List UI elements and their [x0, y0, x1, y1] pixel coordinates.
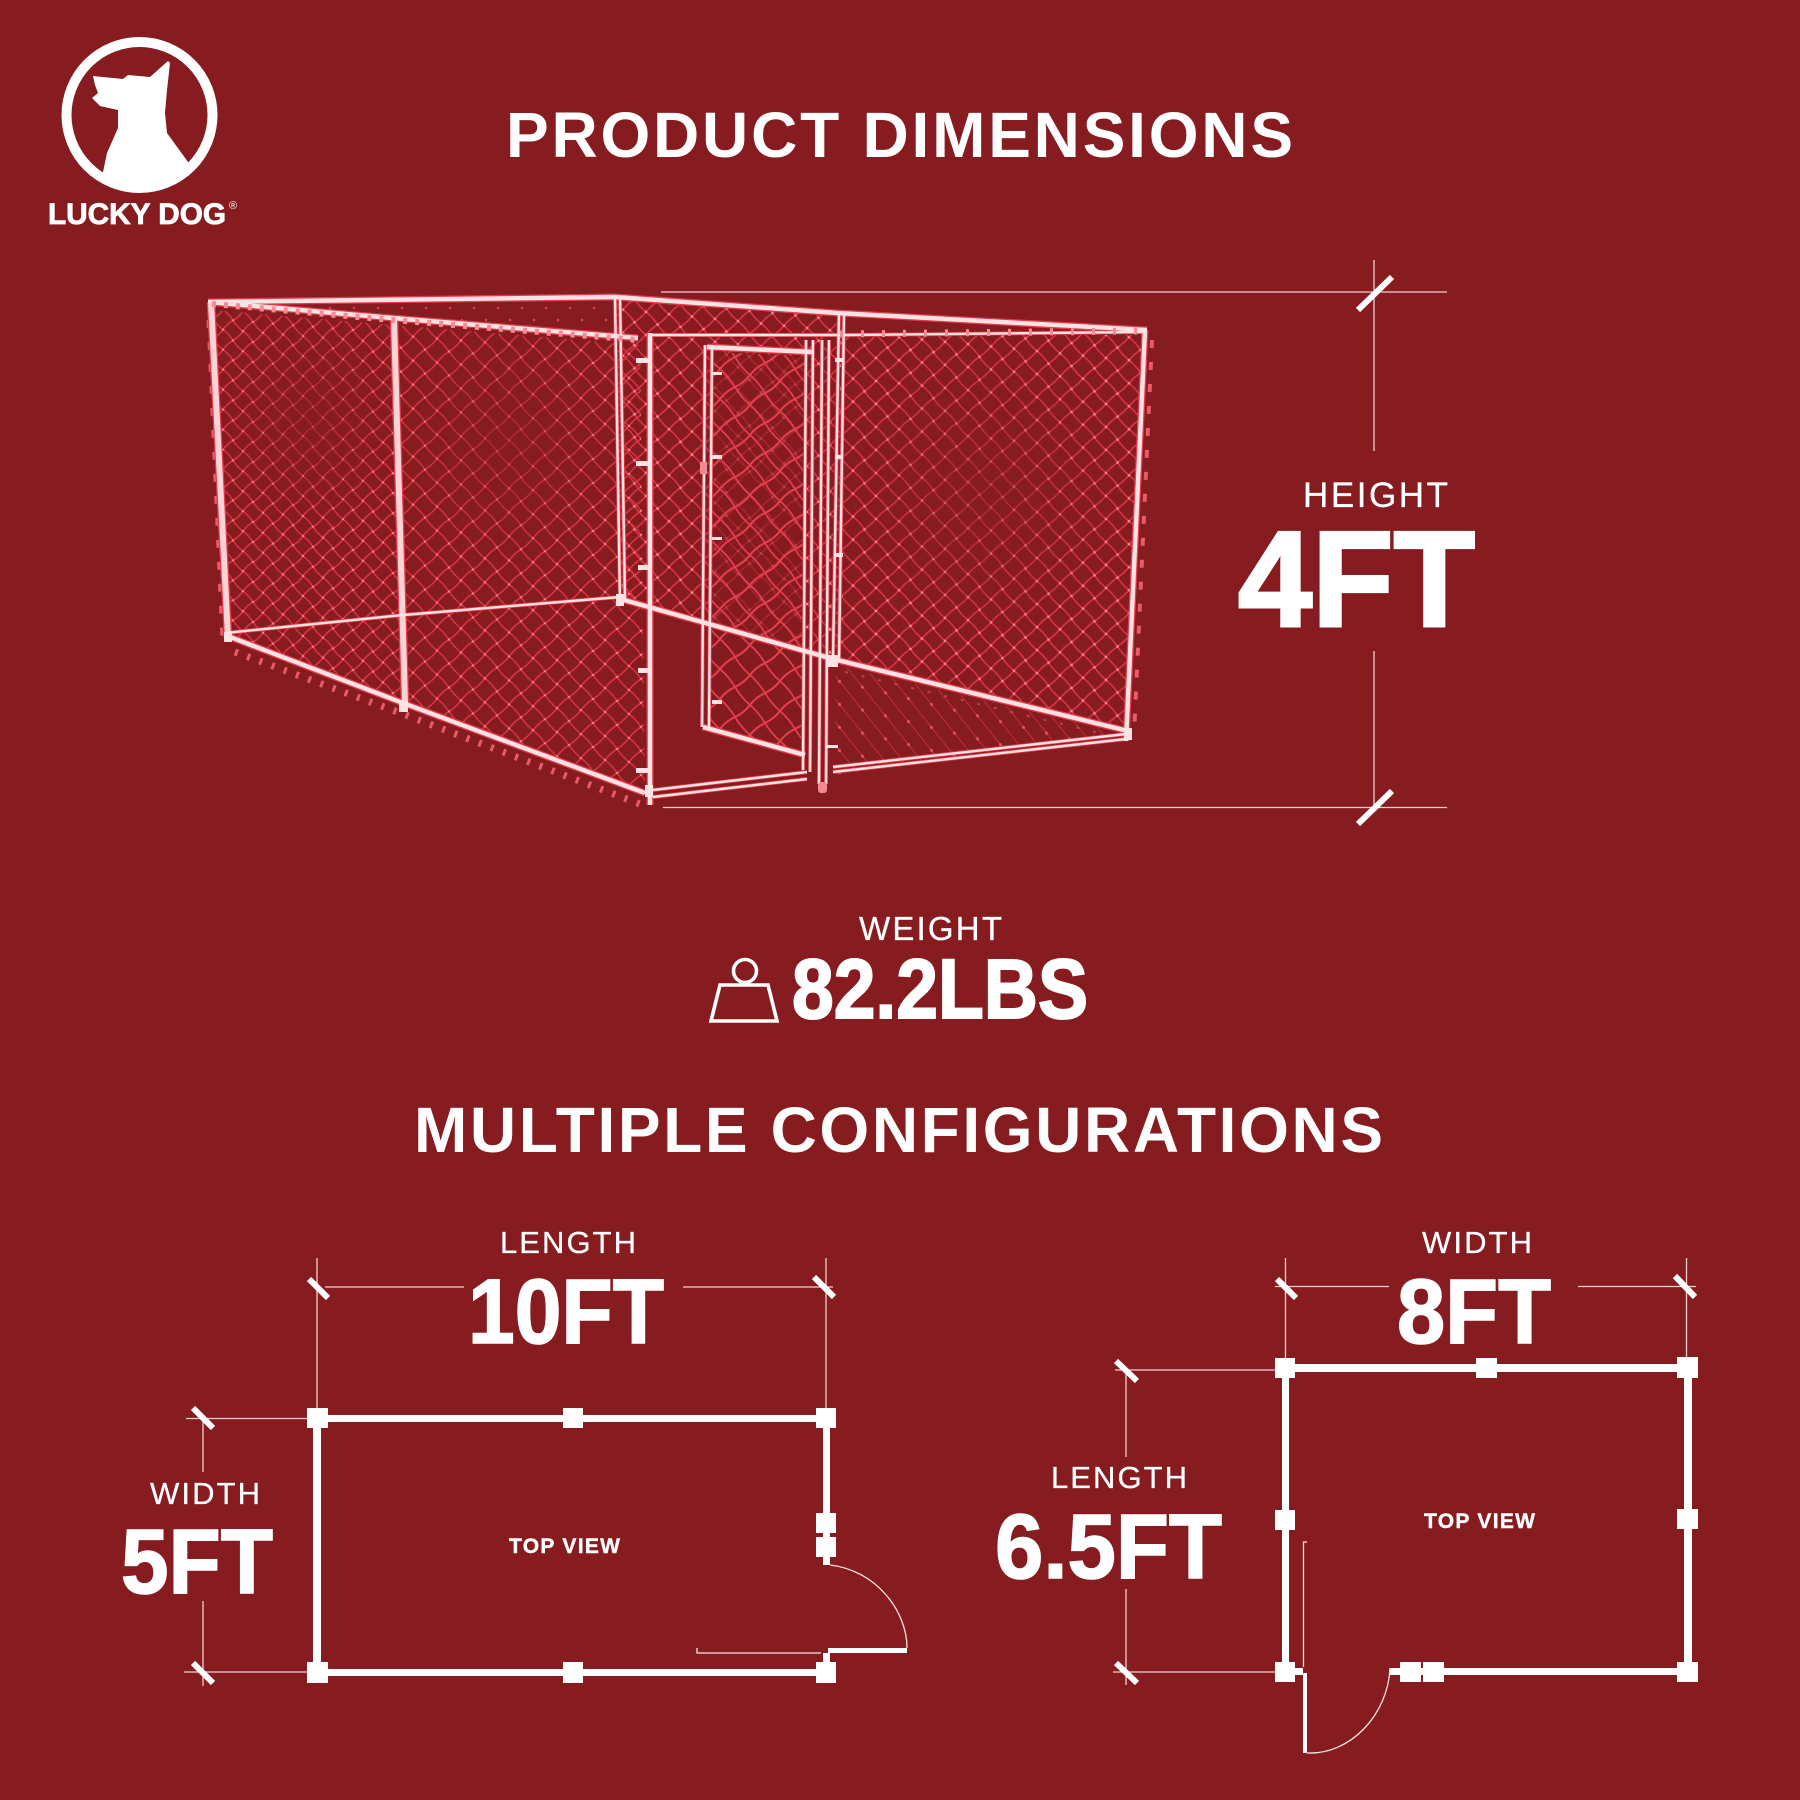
- width label: WIDTH: [1422, 1225, 1532, 1260]
- frame tubes: [208, 297, 1147, 805]
- ticks: [193, 1277, 834, 1683]
- weight label: WEIGHT: [859, 910, 1002, 947]
- mesh: rear wall: [208, 297, 839, 659]
- rail chain knuckles: [212, 304, 1143, 340]
- top view label: TOP VIEW: [509, 1535, 620, 1558]
- mesh: left front wall: [212, 310, 645, 793]
- weight value: 82.2LBS: [792, 942, 1088, 1036]
- mesh: right wall: [833, 335, 1147, 733]
- height value: 4FT: [1238, 503, 1475, 655]
- length label: LENGTH: [1051, 1460, 1187, 1495]
- top view label: TOP VIEW: [1424, 1510, 1535, 1533]
- icon: weight: [711, 960, 777, 1021]
- brand name: LUCKY DOG: [48, 198, 226, 231]
- registered mark: ®: [229, 200, 237, 212]
- dimension lines: [184, 1258, 833, 1686]
- walls and posts: [307, 1408, 907, 1683]
- length value: 6.5FT: [995, 1496, 1222, 1598]
- ticks: [1116, 1276, 1695, 1683]
- mesh loops along bottom and right edge: [208, 320, 1152, 804]
- mesh: wall shading: [220, 310, 620, 560]
- dimension lines: [661, 260, 1447, 808]
- logo: Lucky Dog: [48, 42, 237, 231]
- height dimension: [661, 260, 1475, 824]
- ticks: [1358, 277, 1392, 824]
- length value: 10FT: [468, 1261, 664, 1363]
- weight: [711, 910, 1088, 1036]
- mesh: floor shadow: [835, 665, 1128, 775]
- title: product dimensions: PRODUCT DIMENSIONS: [506, 99, 1293, 171]
- door swing: [697, 1565, 907, 1653]
- plan: 8ft by 6.5ft: [995, 1225, 1698, 1753]
- height label: HEIGHT: [1303, 476, 1448, 515]
- kennel illustration: [208, 297, 1152, 805]
- icon: dog in ring: [66, 42, 212, 188]
- walls and posts: [1275, 1357, 1698, 1753]
- mesh: gate door: [710, 352, 806, 754]
- length label: LENGTH: [500, 1225, 636, 1260]
- width value: 5FT: [121, 1511, 273, 1613]
- dimension lines: [1113, 1258, 1696, 1685]
- heading: multiple configurations: MULTIPLE CONFIGURATIONS: [414, 1094, 1383, 1166]
- door swing: [1304, 1542, 1390, 1753]
- width label: WIDTH: [150, 1476, 260, 1511]
- width value: 8FT: [1397, 1261, 1551, 1363]
- post clamps and latch: [224, 358, 1132, 797]
- plan: 10ft by 5ft: [121, 1225, 907, 1686]
